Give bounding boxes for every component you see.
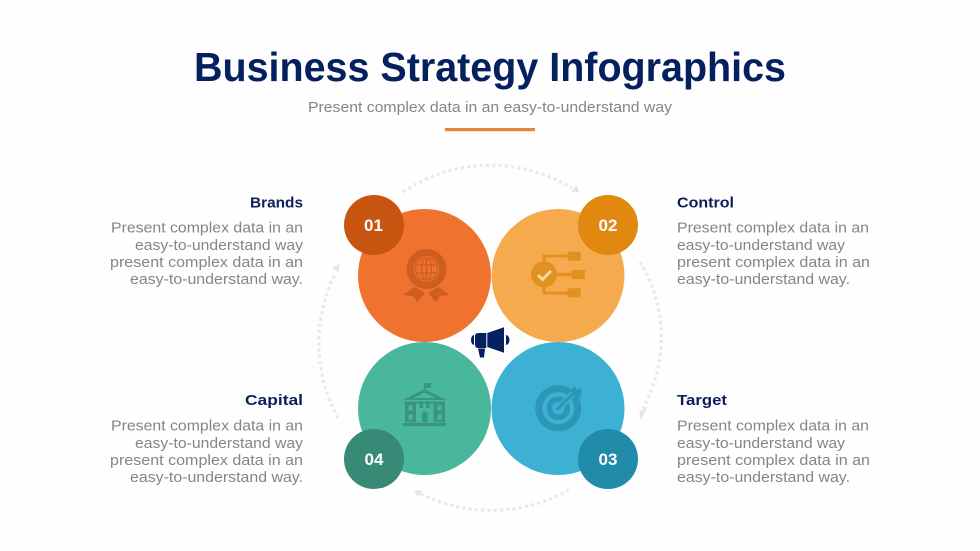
badge: 04: 04 <box>365 450 384 469</box>
text block: Target: present complex data in an <box>677 453 870 469</box>
badge: 01 <box>344 195 404 255</box>
text block: Control <box>677 194 870 288</box>
text block: Target: Target <box>677 392 727 409</box>
circular dotted arrows <box>319 165 661 510</box>
panel: 04 green circle <box>358 342 491 475</box>
text block: Control: Control <box>677 194 734 212</box>
badge: 01: 01 <box>364 216 383 235</box>
text block: Target: easy-to-understand way. <box>677 470 850 486</box>
badge: 02: 02 <box>599 216 617 235</box>
icon: globe medal <box>403 249 450 302</box>
text block: Brands: easy-to-understand way. <box>130 272 303 288</box>
text block: Target: easy-to-understand way <box>677 436 846 452</box>
panel: 01 orange circle <box>358 209 491 342</box>
text block: Brands: present complex data in an <box>110 255 303 271</box>
text block: Capital: easy-to-understand way. <box>130 470 303 486</box>
text block: Capital <box>110 392 304 486</box>
title: Business Strategy Infographics <box>194 44 786 90</box>
badge: 04 <box>344 429 404 489</box>
text block: Capital: present complex data in an <box>110 453 303 469</box>
text block: Capital: Present complex data in an <box>111 418 303 434</box>
text block: Control: easy-to-understand way. <box>677 272 850 288</box>
text block: Control: present complex data in an <box>677 255 870 271</box>
badge: 02 <box>578 195 638 255</box>
subtitle: Present complex data in an easy-to-understand way <box>308 99 673 116</box>
icon: capital building <box>403 383 446 426</box>
text block: Control: easy-to-understand way <box>677 238 846 254</box>
panel: 02 amber circle <box>492 209 624 342</box>
text block: Target <box>677 392 870 486</box>
text block: Target: Present complex data in an <box>677 418 869 434</box>
text block: Control: Present complex data in an <box>677 220 869 236</box>
text block: Brands <box>110 194 304 288</box>
text block: Brands: easy-to-understand way <box>135 238 304 254</box>
icon: process flow check <box>531 252 585 297</box>
icon: megaphone <box>471 327 510 358</box>
icon: target with arrow <box>539 385 582 428</box>
text block: Brands: Brands <box>250 194 303 212</box>
badge: 03 <box>578 429 638 489</box>
badge: 03: 03 <box>599 450 617 469</box>
text block: Brands: Present complex data in an <box>111 220 303 236</box>
text block: Capital: easy-to-understand way <box>135 436 304 452</box>
text block: Capital: Capital <box>245 392 303 409</box>
panel: 03 blue circle <box>492 342 624 475</box>
title accent bar <box>445 128 535 131</box>
